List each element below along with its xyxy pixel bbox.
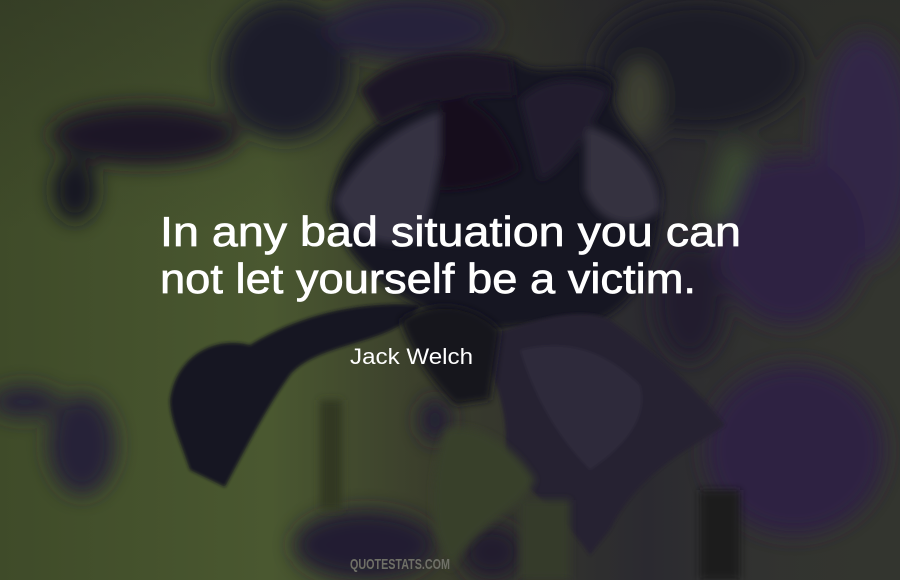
central iris flower xyxy=(170,53,740,580)
quote text: not let yourself be a victim. xyxy=(160,255,696,302)
quote text: In any bad situation you can xyxy=(160,208,741,255)
watermark: QUOTESTATS.COM xyxy=(350,556,450,573)
quote text xyxy=(160,208,741,302)
author: Jack Welch xyxy=(350,344,473,369)
